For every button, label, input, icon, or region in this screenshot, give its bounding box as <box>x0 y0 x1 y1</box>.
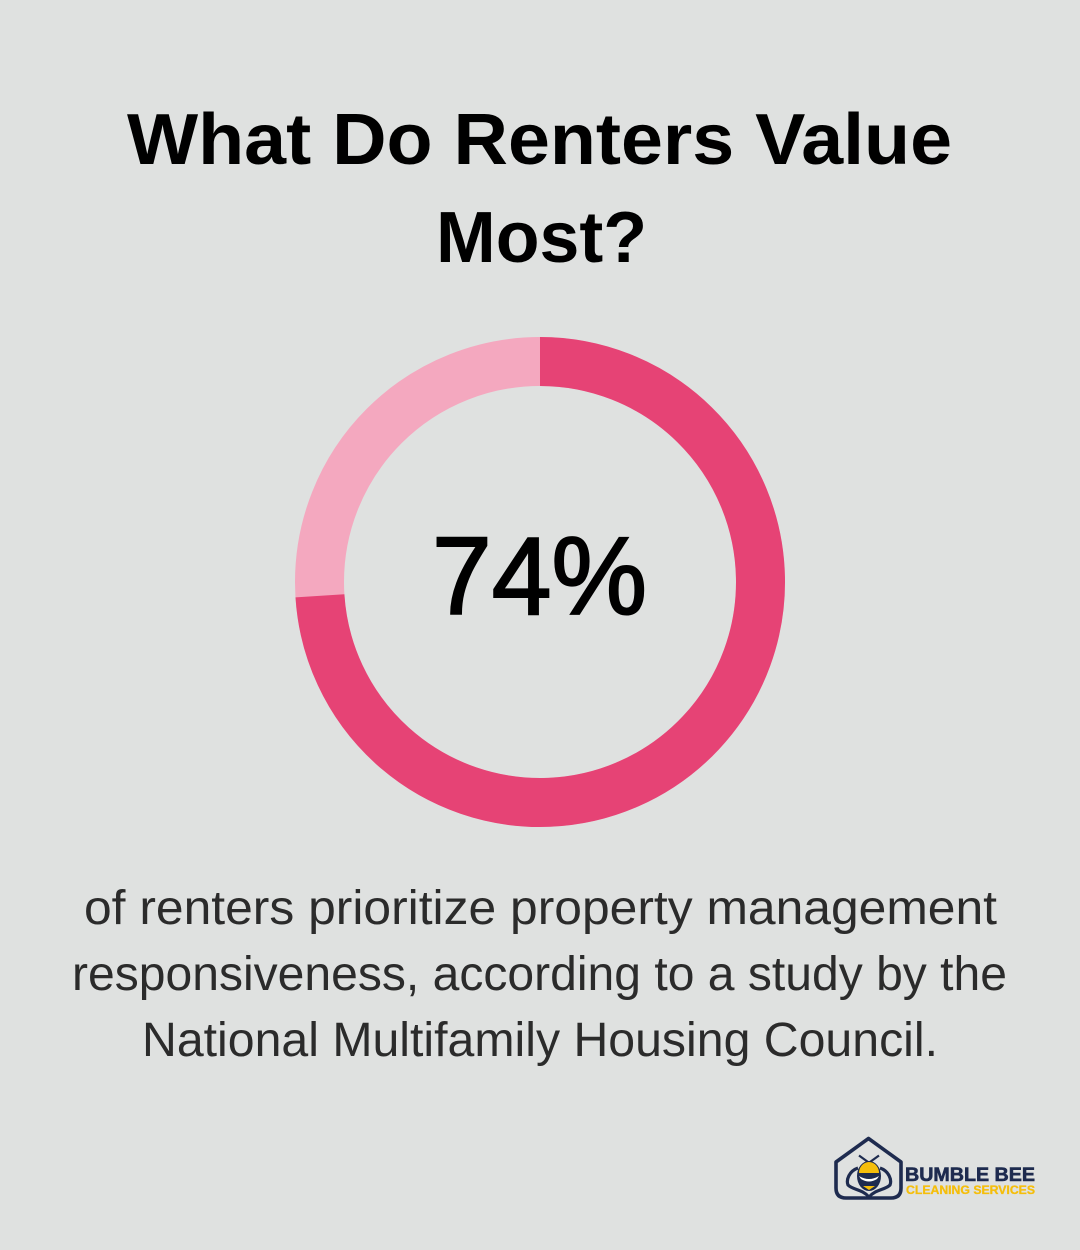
brand name: BUMBLE BEE <box>905 1165 1035 1186</box>
title: What Do Renters Value <box>127 100 952 180</box>
description text: of renters prioritize property management <box>84 882 997 935</box>
donut track <box>320 362 760 802</box>
brand tagline: CLEANING SERVICES <box>906 1185 1035 1197</box>
title <box>127 100 952 278</box>
donut chart: 74% <box>320 362 761 803</box>
description text <box>72 882 1007 1067</box>
logo <box>836 1138 1035 1198</box>
title: Most? <box>436 198 647 278</box>
description text: responsiveness, according to a study by the <box>72 948 1007 1001</box>
big number: 74% <box>432 515 647 638</box>
donut value arc <box>320 362 761 803</box>
icon: house with bee <box>836 1138 901 1198</box>
description text: National Multifamily Housing Council. <box>142 1014 938 1067</box>
